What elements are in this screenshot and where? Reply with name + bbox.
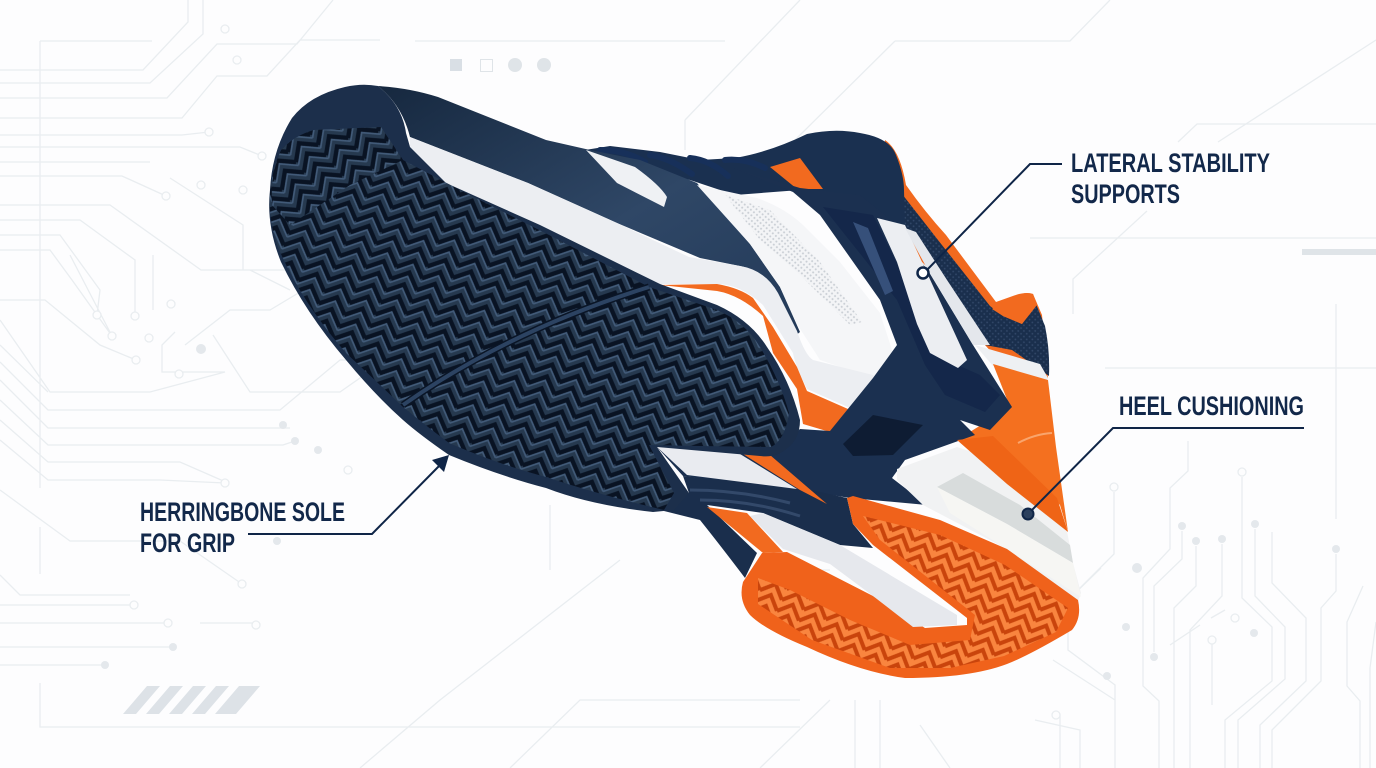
decorative top markers [450,58,551,72]
label: heel cushioning: HEEL CUSHIONING [1119,391,1304,421]
callout dot: lateral [918,268,928,278]
callout: heel cushioning [1022,391,1304,520]
shoe: lower navy ridged band [640,476,873,578]
shoe: orange heel band [957,436,1068,532]
shoe: orange heel outsole [742,496,1079,678]
label: lateral stability supports: LATERAL STABILITY [1071,148,1270,178]
callout line: lateral [925,164,1062,272]
arrowhead: herringbone [432,455,449,472]
shoe: white midsole [410,137,880,408]
shoe: white heel cutout [707,507,957,627]
shoe: orange heel tab [992,293,1037,324]
label: herringbone sole for grip [140,497,345,558]
shoe: navy mesh collar [895,185,1049,376]
shoe: white side panel [586,150,667,207]
shoe: white strip above orange heel [975,345,1048,382]
decorative bar [1302,249,1376,255]
shoe: white mesh panel [697,185,893,378]
shoe: stability frame [657,168,1012,505]
shoe illustration [269,85,1081,678]
decorative hatch stripes [123,686,260,714]
shoe: orange heel counter [957,364,1068,532]
label: herringbone sole for grip: HERRINGBONE SOLE [140,497,345,527]
callout: herringbone sole [140,455,449,558]
callout line: herringbone [248,463,442,534]
shoe: forefoot outsole rim [269,85,800,512]
callout: lateral stability supports [918,148,1270,278]
shoe: white heel foam [897,447,1081,604]
callout dot: heel [1022,508,1034,520]
label: herringbone sole for grip: FOR GRIP [140,528,235,558]
shoe: navy toe band [378,86,800,340]
shoe: thin white collar strip [905,228,990,345]
label: lateral stability supports [1071,148,1270,209]
shoe: orange collar trim [880,140,1048,395]
label: lateral stability supports: SUPPORTS [1071,179,1180,209]
shoe: herringbone tread [270,127,789,510]
shoe: white mid cutouts [657,445,827,504]
shoe: orange midsole stripe [660,284,848,432]
callout line: heel [1028,428,1304,514]
shoe: lace area and tongue [585,131,905,230]
